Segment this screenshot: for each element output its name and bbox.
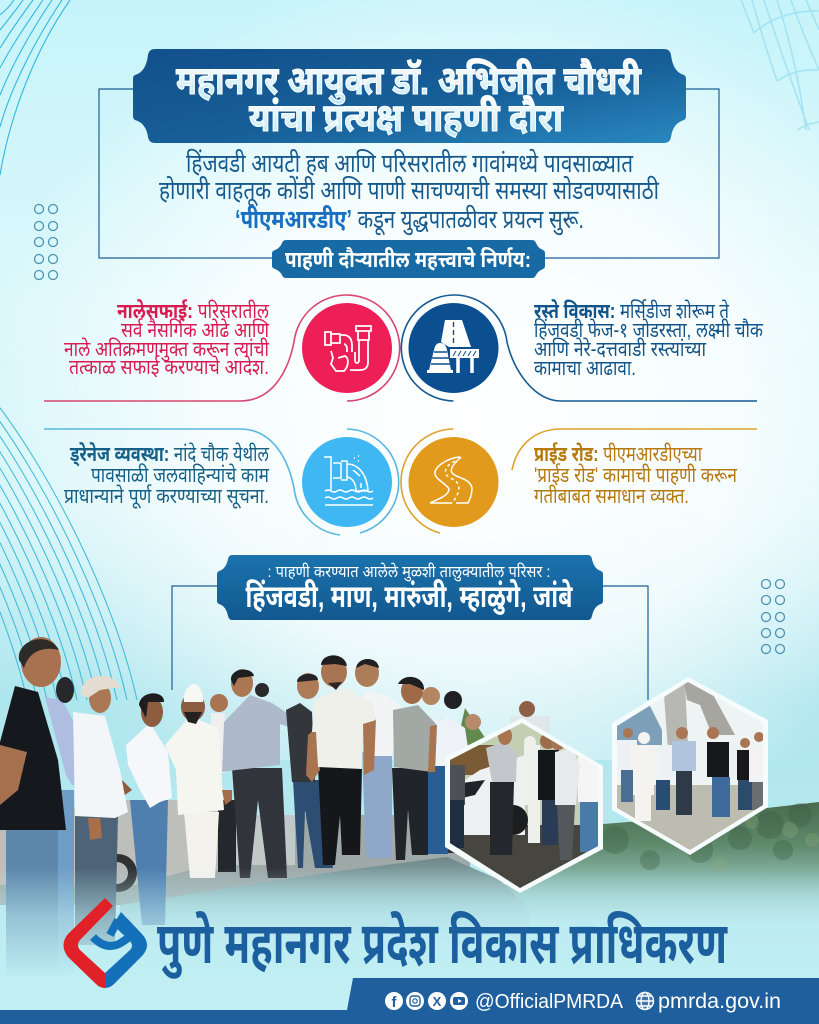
areas frame [172,586,648,700]
logo [64,898,147,988]
icon: road and cone [408,303,498,393]
back row people [210,683,550,872]
text: रस्ते विकास: मर्सिडीज शोरूम ते [534,299,730,323]
car [0,800,235,885]
arc connector [401,429,757,533]
text [64,299,270,379]
text: ड्रेनेज व्यवस्था: नांदे चौक येथील [69,442,269,467]
road behind [0,815,470,905]
icon: facebook: f [392,994,398,1011]
panel: drainage [44,429,399,535]
arc connector [44,295,400,401]
title [176,59,642,140]
foreground fade [0,868,819,978]
text: पावसाळी जलवाहिन्यांचे काम [91,463,269,487]
arc connector [401,295,757,401]
intro text: हिंजवडी आयटी हब आणि परिसरातील गावांमध्ये पावसाळ्यात [186,148,634,178]
person 7: black tee [286,673,333,868]
intro text: ‘पीएमआरडीए’ कडून युद्धपातळीवर प्रयत्न सुरू. [235,204,584,235]
icon: winding road [408,437,498,527]
areas banner: हिंजवडी, माण, मारुंजी, म्हाळुंगे, जांबे [246,579,573,616]
rubble [120,857,530,940]
white shirt right [578,756,598,802]
text [64,442,269,509]
icon: drain pipe [302,303,392,393]
person 6: blue-grey shirt pointing [222,669,312,878]
areas banner [217,555,603,620]
areas banner: : पाहणी करण्यात आलेले मुळशी तालुक्यातील परिसर : [268,562,550,582]
main photo: inspection team [0,637,819,978]
intro text [159,148,660,235]
text: आणि नेरे-दत्तवाडी रस्त्यांच्या [534,337,706,361]
title banner [133,49,686,143]
header frame [99,89,719,258]
decisions sub-banner [272,240,545,278]
decorative dots left [34,204,58,280]
icon: instagram [406,992,424,1010]
text: सर्व नैसर्गिक ओढे आणि [121,317,270,342]
text: कामाचा आढावा. [534,357,636,380]
icon: facebook [385,992,403,1011]
icon: globe [636,992,654,1010]
social handle: @OfficialPMRDA [475,991,624,1013]
text: 'प्राईड रोड' कामाची पाहणी करून [534,463,737,487]
arc connector [44,429,399,535]
panel: pride road [401,429,757,533]
text [534,442,737,508]
people [617,740,672,750]
striped shirt man [555,748,580,805]
text: प्राधान्याने पूर्ण करण्याच्या सूचना. [64,484,269,509]
person 8: white polo [306,655,376,865]
icon: x: X [433,994,442,1009]
icon: youtube [450,992,468,1010]
text: तत्काळ सफाई करण्याचे आदेश. [69,355,269,379]
panel: roads [401,295,764,401]
photo: hexagon 2 [612,677,768,855]
text: प्राईड रोड: पीएमआरडीएच्या [534,442,702,466]
icon: outfall pipe [302,437,392,527]
grey shirt man [486,742,517,782]
photo: hexagon 1 [445,715,605,895]
left bystander [449,765,465,805]
decorative dots right [762,580,784,654]
person 10: striped shirt [392,677,437,860]
person 1: black polo [0,637,74,978]
text: नाले अतिक्रमणमुक्त करून त्यांची [64,337,269,362]
text: गतीबाबत समाधान व्यक्त. [534,484,689,508]
person 2: light blue shirt [45,677,132,797]
text: हिंजवडी फेज-१ जोडरस्ता, लक्ष्मी चौक [534,318,764,342]
text: नालेसफाई: परिसरातील [117,299,269,323]
person 5: white kurta [165,684,232,878]
website: pmrda.gov.in [658,990,781,1013]
black tee man [538,750,559,800]
intro text: होणारी वाहतूक कोंडी आणि पाणी साचण्याची समस्या सोडवण्यासाठी [159,175,660,206]
foliage [440,802,819,925]
kurta man [524,745,540,805]
icon: x [428,992,446,1010]
person 9: white shirt blue trousers [355,659,417,858]
text [534,299,764,380]
person 3: white shirt and cap [73,676,128,945]
decisions sub-banner: पाहणी दौऱ्यातील महत्त्वाचे निर्णय: [285,247,531,272]
title: महानगर आयुक्त डॉ. अभिजीत चौधरी [176,59,642,105]
footer [0,978,819,1024]
panel: nale safai [44,295,400,401]
person 4: white shirt jeans [126,693,172,925]
title: यांचा प्रत्यक्ष पाहणी दौरा [249,96,564,140]
